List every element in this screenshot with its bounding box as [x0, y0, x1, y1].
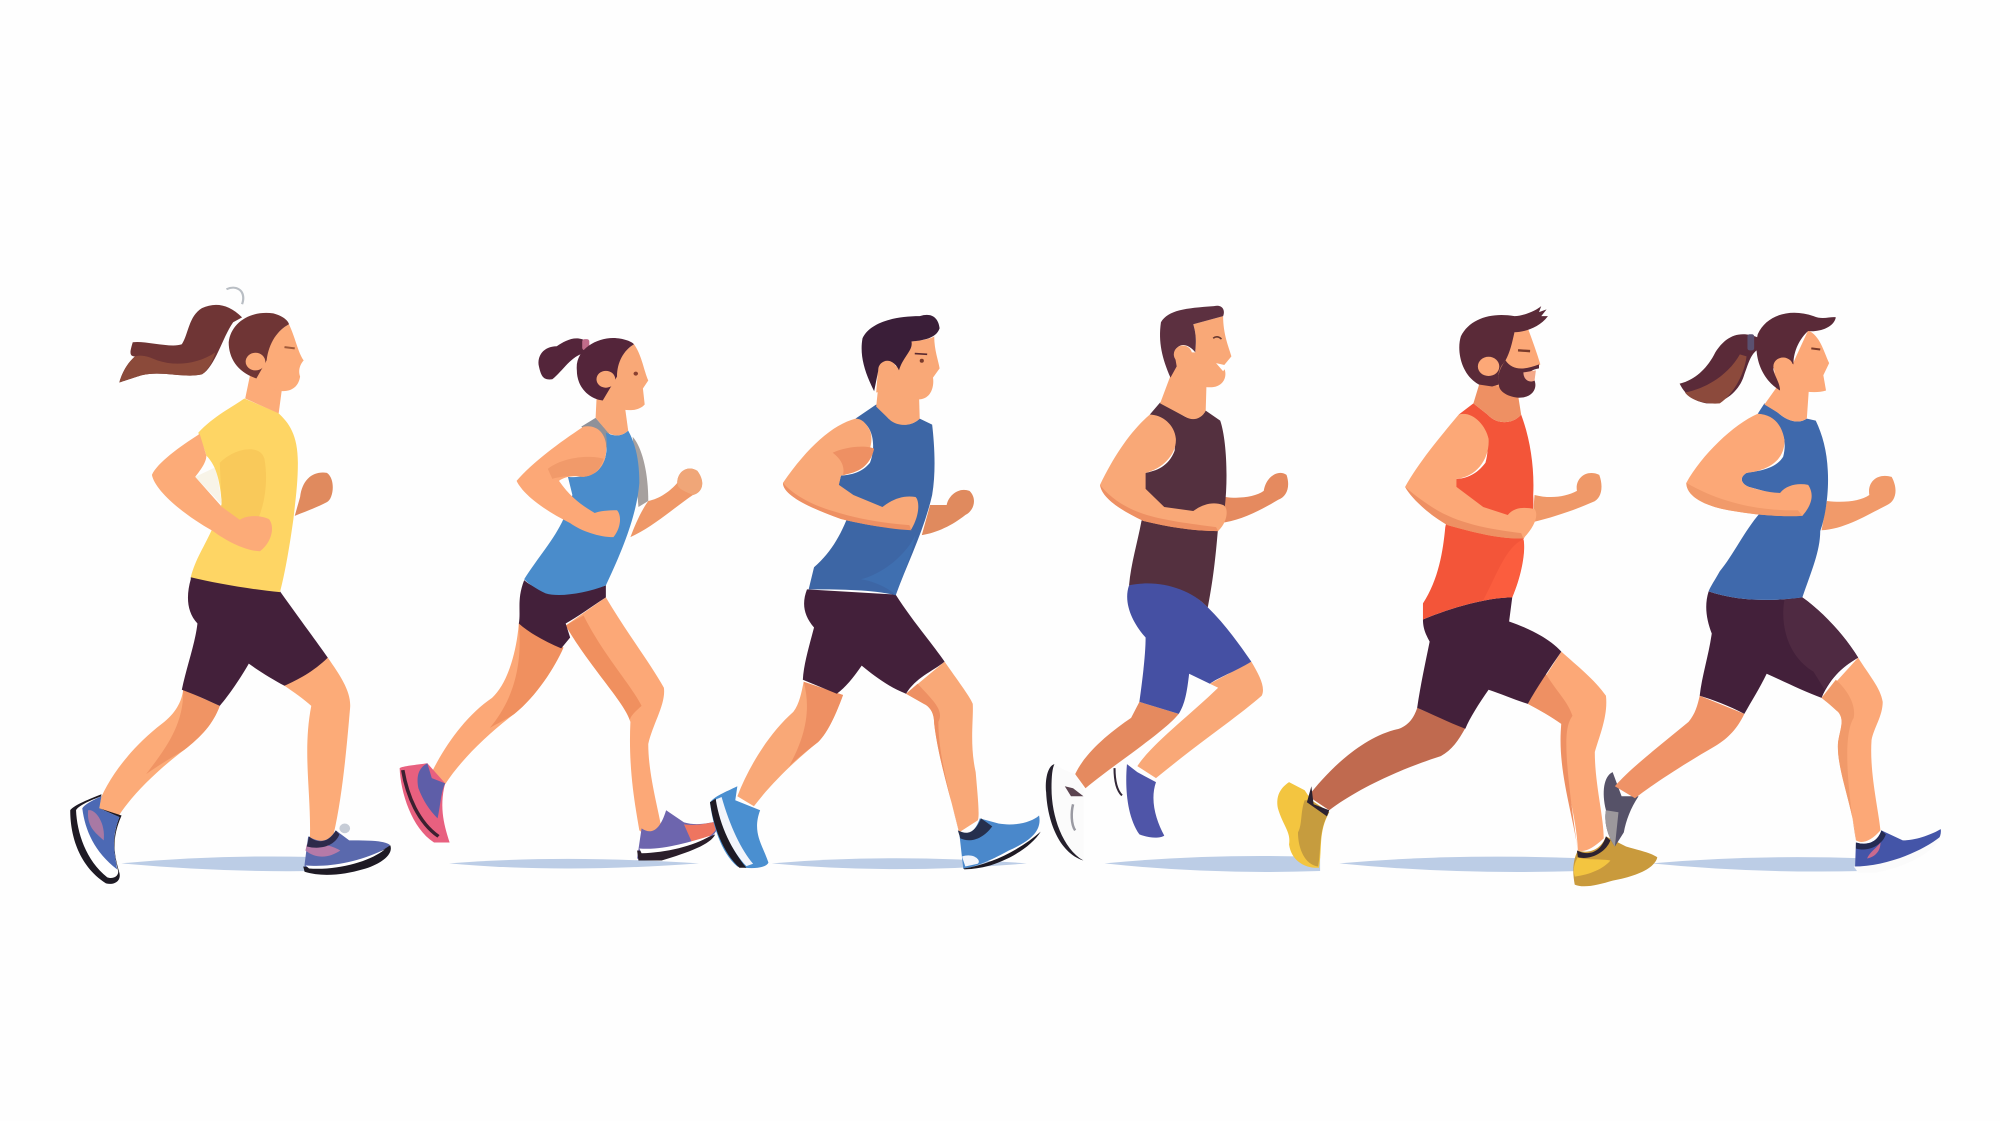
- rear shoe: [400, 763, 450, 842]
- front shoe: [637, 810, 720, 859]
- front shoe: [305, 830, 390, 874]
- hair: [862, 315, 940, 391]
- rear leg: [737, 682, 843, 806]
- back arm: [1220, 473, 1288, 523]
- front arm: [152, 434, 272, 551]
- tank: [1129, 403, 1227, 607]
- face: [1173, 316, 1231, 387]
- front leg: [566, 597, 664, 835]
- rear shoe: [1277, 782, 1329, 868]
- front shoe: [959, 816, 1040, 869]
- tank: [524, 431, 639, 595]
- arm: [783, 419, 918, 529]
- ponytail: [1680, 334, 1760, 403]
- grey straps: [633, 437, 648, 507]
- runner 4: man in dark tank and blue shorts: [1046, 306, 1288, 861]
- neck: [1473, 378, 1521, 422]
- arm: [1100, 415, 1227, 531]
- tank: [1709, 403, 1828, 600]
- neck: [876, 378, 920, 425]
- neck: [1160, 372, 1207, 419]
- face: [1483, 328, 1540, 386]
- face: [597, 344, 648, 410]
- rear shoe: [1604, 772, 1639, 846]
- runner 3: man in dark blue tank: [710, 315, 1041, 869]
- front leg: [284, 658, 350, 842]
- front leg: [906, 662, 979, 832]
- arm: [1686, 414, 1812, 516]
- front leg: [1137, 662, 1263, 778]
- ground shadows: [121, 856, 1862, 872]
- neck: [1764, 382, 1809, 422]
- hair: [229, 313, 289, 378]
- hair: [577, 338, 634, 401]
- back arm: [922, 490, 974, 535]
- front leg: [1822, 658, 1883, 842]
- shirt: [191, 399, 298, 592]
- tank: [1423, 403, 1533, 619]
- front shoe: [1855, 829, 1941, 871]
- hair: [1756, 313, 1836, 391]
- runner 1: woman in yellow shirt: [70, 288, 391, 884]
- face: [1773, 330, 1829, 392]
- rear leg: [430, 624, 563, 784]
- back arm: [295, 473, 333, 516]
- rear shoe: [70, 794, 122, 884]
- ponytail: [119, 305, 242, 382]
- shorts: [803, 589, 945, 694]
- front shoe: [1573, 836, 1657, 886]
- ponytail: [538, 338, 588, 379]
- back arm: [1822, 476, 1896, 530]
- face: [876, 336, 940, 399]
- front shoe: [1126, 764, 1164, 838]
- rear leg: [97, 690, 220, 818]
- shorts: [182, 577, 328, 706]
- runner 2: woman in light blue tank: [400, 338, 720, 861]
- rear leg: [1075, 702, 1179, 788]
- rear shoe: [1046, 764, 1083, 861]
- runner 5: bearded man in orange tank: [1277, 306, 1657, 886]
- back arm: [1532, 473, 1602, 522]
- rear leg: [1308, 708, 1465, 810]
- neck: [245, 370, 282, 413]
- rear leg: [1615, 696, 1744, 798]
- runner 6: woman in blue tank: [1604, 313, 1941, 873]
- front leg: [1528, 652, 1606, 851]
- hair and beard: [1459, 306, 1548, 386]
- face: [251, 324, 304, 391]
- back arm: [630, 468, 702, 537]
- tank: [809, 405, 935, 595]
- neck: [596, 391, 628, 435]
- hair: [1160, 306, 1224, 378]
- gap behind arm: [195, 467, 222, 505]
- arm: [1405, 414, 1536, 538]
- shorts: [1700, 591, 1858, 714]
- arm: [517, 426, 620, 537]
- shorts: [519, 580, 606, 648]
- rear shoe: [710, 786, 768, 868]
- shorts: [1417, 597, 1561, 729]
- shorts: [1127, 582, 1251, 714]
